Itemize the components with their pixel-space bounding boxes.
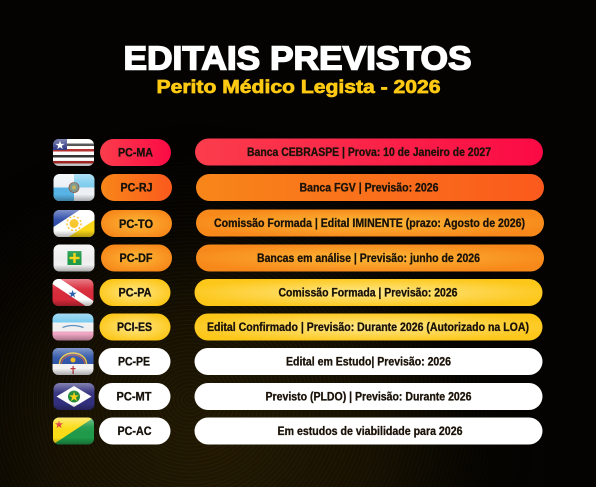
row: PC-AC: Em estudos de viabilidade para 2026: [278, 426, 462, 438]
row: PC-PA: PC-PA: [118, 288, 152, 300]
row: PC-PE: PC-PE: [118, 356, 150, 368]
row: PC-MA: Banca CEBRASPE | Prova: 10 de Janeiro de 2027: [247, 147, 491, 159]
state pill: [98, 383, 170, 410]
row: PC-DF: Bancas em análise | Previsão: junho de 2026: [257, 253, 480, 265]
state pill: [101, 174, 172, 201]
state pill: [100, 139, 171, 166]
icon: Pará flag: ★: [68, 289, 77, 299]
background: [0, 219, 461, 487]
info bar: [196, 244, 544, 272]
info bar: [195, 138, 543, 166]
row: PC-TO: Comissão Formada | Edital IMINENTE (prazo: Agosto de 2026): [214, 218, 525, 230]
row: PC-PA: Comissão Formada | Previsão: 2026: [278, 288, 458, 300]
row: PC-MT: PC-MT: [116, 392, 152, 404]
row: PCI-ES: [52, 314, 542, 340]
info bar: [194, 314, 542, 340]
state pill: [100, 279, 170, 306]
icon: Maranhão flag: ★: [56, 140, 65, 152]
icon: Distrito Federal flag: [54, 244, 94, 272]
row: PC-PE: Edital em Estudo| Previsão: 2026: [286, 356, 451, 368]
state pill: [101, 210, 172, 237]
icon: Mato Grosso flag: ★: [69, 392, 79, 404]
icon: Acre flag: [53, 418, 94, 444]
icon: Rio de Janeiro flag: [54, 174, 94, 201]
subtitle: Perito Médico Legista - 2026: [156, 77, 440, 97]
row: PC-RJ: PC-RJ: [120, 182, 152, 194]
row: PC-TO: PC-TO: [119, 219, 153, 231]
icon: Tocantins flag: [54, 210, 94, 237]
row: PC-DF: PC-DF: [120, 253, 152, 265]
row: PC-PA: [52, 279, 542, 306]
row: PC-MT: [54, 383, 542, 410]
icon: Mato Grosso flag: [54, 383, 94, 410]
info bar: [194, 383, 542, 410]
row: PC-AC: [53, 418, 542, 444]
info bar: [194, 279, 542, 306]
info bar: [196, 174, 544, 201]
state pill: [100, 314, 170, 340]
row: PC-DF: [54, 244, 544, 272]
row: PC-MA: [53, 138, 543, 166]
row: PCI-ES: PCI-ES: [117, 322, 152, 334]
state pill: [101, 244, 172, 272]
row: PC-RJ: [54, 174, 544, 201]
icon: Espírito Santo flag: [52, 314, 94, 340]
icon: Pará flag: [52, 279, 94, 306]
info bar: [194, 348, 542, 375]
row: PC-RJ: Banca FGV | Previsão: 2026: [300, 182, 438, 194]
row: PCI-ES: Edital Confirmado | Previsão: Durante 2026 (Autorizado na LOA): [207, 322, 529, 334]
info bar: [196, 210, 544, 236]
row: PC-MT: Previsto (PLDO) | Previsão: Durante 2026: [266, 392, 472, 404]
row: PC-MA: PC-MA: [118, 148, 153, 160]
state pill: [98, 348, 170, 375]
icon: Acre flag: ★: [55, 420, 64, 430]
row: PC-AC: PC-AC: [118, 426, 152, 438]
title: EDITAIS PREVISTOS: [124, 40, 472, 76]
row: PC-PE: [52, 348, 542, 375]
row: PC-TO: [54, 210, 544, 237]
icon: Maranhão flag: [53, 139, 94, 166]
state pill: [99, 418, 170, 444]
info bar: [194, 418, 542, 444]
icon: Pernambuco flag: [52, 348, 94, 375]
